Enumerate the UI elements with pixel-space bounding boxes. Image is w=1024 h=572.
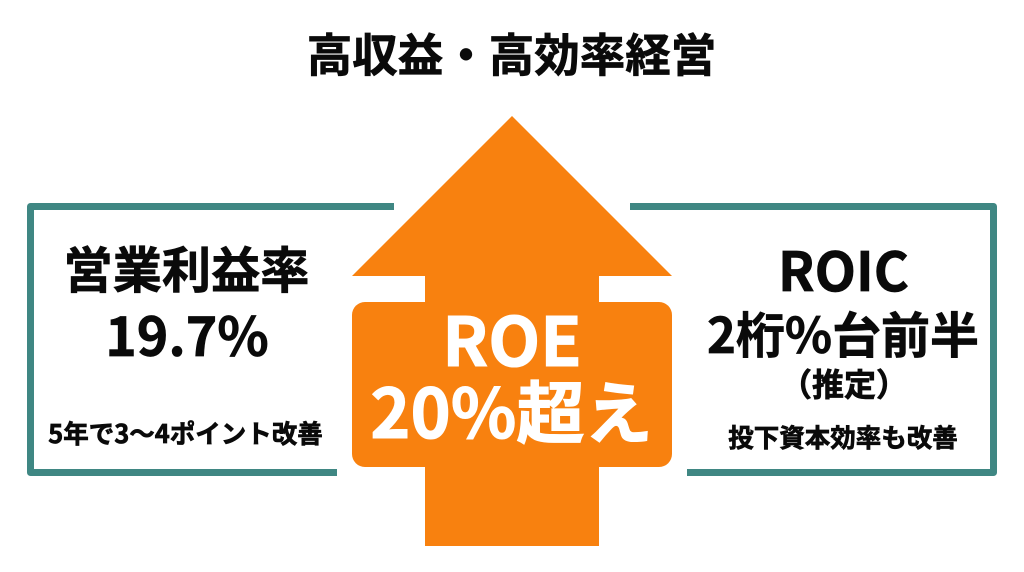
ROE label line one: ROE: [442, 289, 582, 386]
right panel qualifier: （推定）: [780, 360, 908, 406]
panel: ROIC: [630, 206, 994, 472]
right panel heading: ROIC: [778, 230, 909, 307]
central arrow: [352, 116, 672, 546]
left panel value: 19.7%: [105, 295, 269, 372]
ROE label box: [352, 302, 672, 467]
right panel note: 投下資本効率も改善: [728, 418, 958, 455]
left panel frame: [30, 206, 394, 472]
right panel value: 2桁%台前半: [707, 297, 979, 368]
ROE label line two: 20%超え: [370, 359, 653, 458]
left panel heading: 営業利益率: [64, 232, 309, 303]
right panel frame: [630, 206, 994, 472]
left panel note: 5年で3〜4ポイント改善: [48, 414, 323, 451]
title: 高収益・高効率経営: [307, 20, 716, 86]
arrow shape: [352, 116, 672, 546]
panel: operating margin: [30, 206, 394, 472]
